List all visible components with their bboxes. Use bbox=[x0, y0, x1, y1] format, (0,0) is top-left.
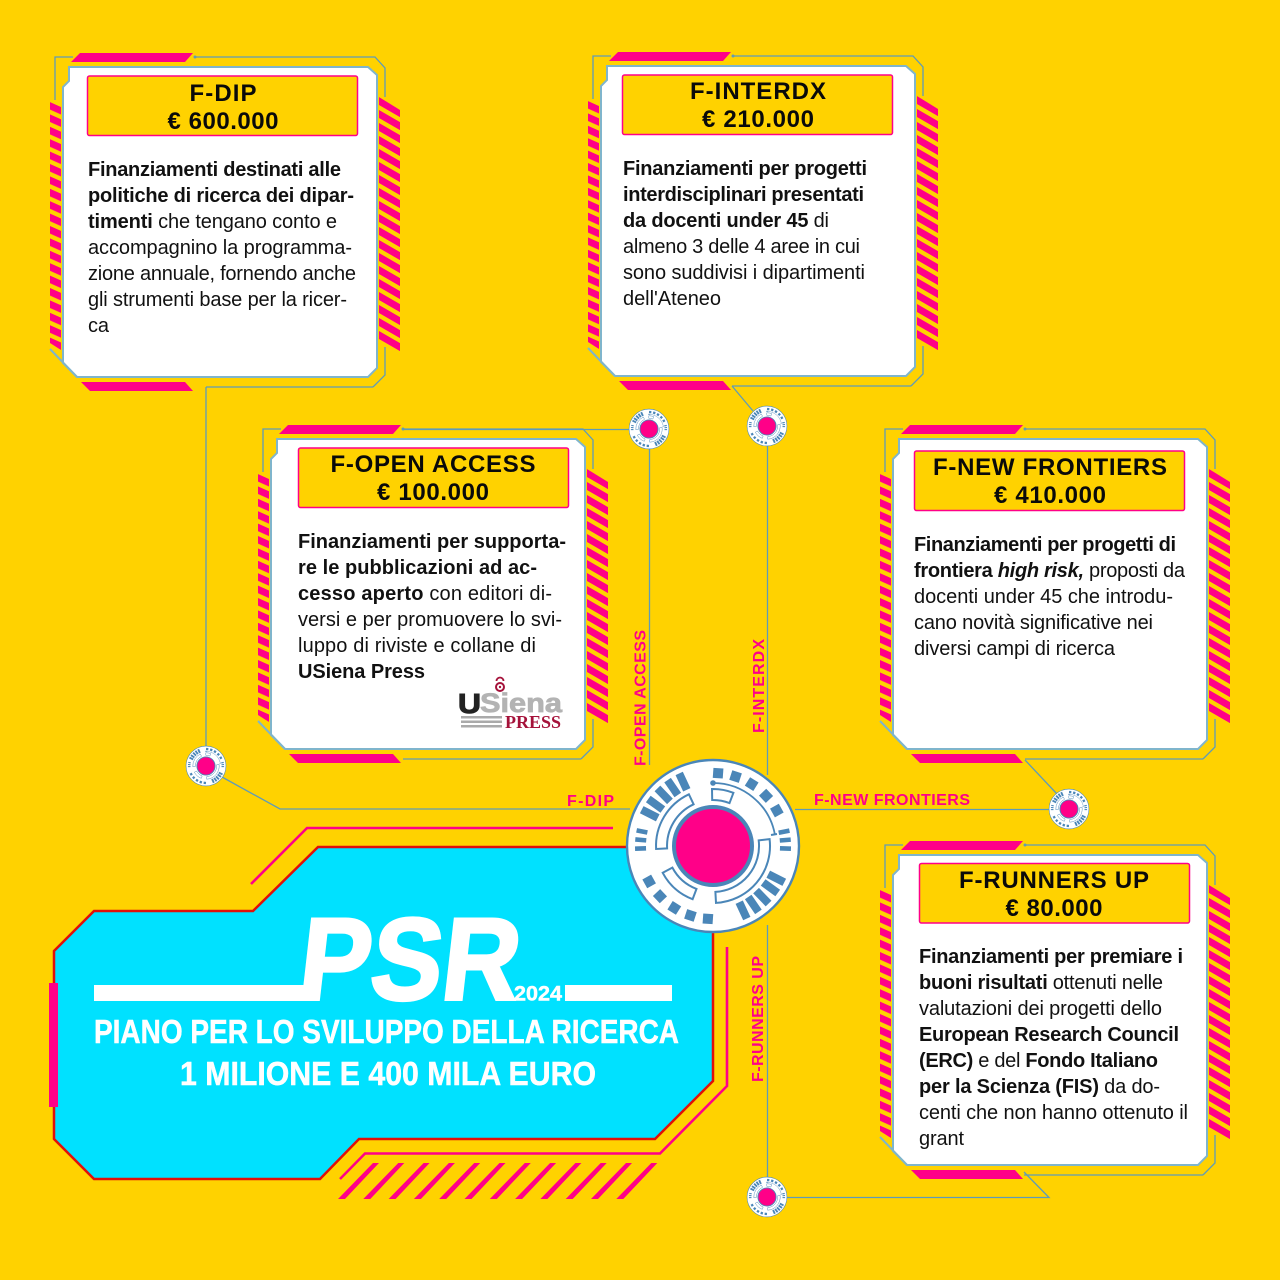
card: F-RUNNERS UP bbox=[880, 841, 1230, 1179]
text: F-RUNNERS UP description: grant bbox=[919, 1128, 964, 1150]
label: F-NEW FRONTIERS: F-NEW FRONTIERS bbox=[814, 792, 970, 809]
header: F-INTERDX: F-INTERDX bbox=[690, 78, 826, 105]
text: F-DIP description: accompagnino la programma- bbox=[88, 237, 352, 259]
label: F-RUNNERS UP: F-RUNNERS UP bbox=[750, 956, 767, 1082]
header: F-OPEN ACCESS: € 100.000 bbox=[377, 479, 489, 506]
text: F-INTERDX description: da docenti under 45 di bbox=[623, 210, 829, 232]
node: F-OPEN ACCESS bbox=[629, 409, 669, 449]
text: F-RUNNERS UP description: (ERC) e del Fondo Italiano bbox=[919, 1050, 1158, 1072]
decoration: pink stripes bbox=[338, 1163, 657, 1199]
text: F-OPEN ACCESS description: USiena Press bbox=[298, 661, 425, 683]
text: F-OPEN ACCESS description bbox=[298, 531, 566, 683]
central hub bbox=[627, 760, 799, 932]
text: F-DIP description bbox=[88, 159, 356, 337]
header: F-INTERDX bbox=[622, 75, 892, 134]
text: F-INTERDX description: interdisciplinari presentati bbox=[623, 184, 864, 206]
text: F-DIP description: politiche di ricerca dei dipar- bbox=[88, 185, 354, 207]
text: F-OPEN ACCESS description: versi e per promuovere lo svi- bbox=[298, 609, 562, 631]
text: F-DIP description: ca bbox=[88, 315, 110, 337]
card: F-DIP bbox=[50, 53, 400, 391]
card: F-OPEN ACCESS bbox=[258, 425, 608, 763]
logo: USiena Press bbox=[458, 678, 563, 732]
text: F-INTERDX description: sono suddivisi i dipartimenti bbox=[623, 262, 865, 284]
header: F-RUNNERS UP: F-RUNNERS UP bbox=[959, 867, 1149, 894]
node: F-RUNNERS UP bbox=[747, 1177, 787, 1217]
header: F-NEW FRONTIERS bbox=[914, 451, 1184, 510]
header: F-NEW FRONTIERS: F-NEW FRONTIERS bbox=[933, 454, 1167, 481]
header: F-DIP bbox=[88, 76, 358, 136]
text: F-RUNNERS UP description bbox=[919, 946, 1188, 1150]
text: F-DIP description: zione annuale, fornendo anche bbox=[88, 263, 356, 285]
logo: USiena Press: Siena bbox=[480, 688, 563, 718]
header: F-OPEN ACCESS bbox=[298, 448, 568, 508]
text: F-INTERDX description: Finanziamenti per progetti bbox=[623, 158, 867, 180]
text: F-NEW FRONTIERS description: cano novità significative nei bbox=[914, 612, 1153, 634]
logo: USiena Press: U bbox=[458, 688, 481, 719]
card: F-INTERDX bbox=[588, 52, 938, 390]
subtitle bbox=[94, 1013, 679, 1092]
subtitle: 1 MILIONE E 400 MILA EURO bbox=[180, 1055, 596, 1092]
text: F-NEW FRONTIERS description bbox=[914, 534, 1186, 660]
decoration: pink outline strokes bbox=[251, 828, 727, 1179]
text: F-OPEN ACCESS description: cesso aperto con editori di- bbox=[298, 583, 552, 605]
text: F-INTERDX description: dell'Ateneo bbox=[623, 288, 721, 310]
text: F-DIP description: Finanziamenti destinati alle bbox=[88, 159, 341, 181]
text: F-RUNNERS UP description: European Research Council bbox=[919, 1024, 1179, 1046]
text: F-RUNNERS UP description: per la Scienza (FIS) da do- bbox=[919, 1076, 1160, 1098]
text: F-NEW FRONTIERS description: diversi campi di ricerca bbox=[914, 638, 1116, 660]
subtitle: PIANO PER LO SVILUPPO DELLA RICERCA bbox=[94, 1013, 679, 1050]
header: F-DIP: € 600.000 bbox=[168, 108, 278, 135]
year: 2024: 2024 bbox=[514, 982, 562, 1006]
text: F-NEW FRONTIERS description: frontiera high risk, proposti da bbox=[914, 560, 1186, 582]
logo: USiena Press: PRESS bbox=[505, 712, 561, 732]
header: F-NEW FRONTIERS: € 410.000 bbox=[994, 482, 1106, 509]
header: F-DIP: F-DIP bbox=[190, 80, 256, 107]
text: F-RUNNERS UP description: Finanziamenti per premiare i bbox=[919, 946, 1183, 968]
card: F-NEW FRONTIERS bbox=[880, 425, 1230, 763]
node: F-DIP bbox=[186, 746, 226, 786]
text: F-NEW FRONTIERS description: Finanziamenti per progetti di bbox=[914, 534, 1176, 556]
connector lines bbox=[206, 386, 1057, 1198]
text: F-OPEN ACCESS description: Finanziamenti per supporta- bbox=[298, 531, 566, 553]
header: F-RUNNERS UP: € 80.000 bbox=[1006, 895, 1102, 922]
header: F-OPEN ACCESS: F-OPEN ACCESS bbox=[330, 451, 536, 478]
label: F-OPEN ACCESS: F-OPEN ACCESS bbox=[632, 630, 650, 766]
text: F-OPEN ACCESS description: re le pubblicazioni ad ac- bbox=[298, 557, 537, 579]
text: F-RUNNERS UP description: centi che non hanno ottenuto il bbox=[919, 1102, 1188, 1124]
heading: PSR: PSR bbox=[293, 894, 528, 1024]
header: F-INTERDX: € 210.000 bbox=[702, 106, 814, 133]
text: F-DIP description: gli strumenti base per la ricer- bbox=[88, 289, 347, 311]
label: F-DIP: F-DIP bbox=[567, 793, 614, 810]
header: F-RUNNERS UP bbox=[920, 864, 1190, 923]
text: F-NEW FRONTIERS description: docenti under 45 che introdu- bbox=[914, 586, 1173, 608]
text: F-OPEN ACCESS description: luppo di riviste e collane di bbox=[298, 635, 536, 657]
panel: PSR title bbox=[49, 847, 713, 1179]
text: F-DIP description: timenti che tengano conto e bbox=[88, 211, 337, 233]
label: F-INTERDX: F-INTERDX bbox=[751, 639, 768, 733]
node: F-NEW FRONTIERS bbox=[1049, 789, 1089, 829]
text: F-INTERDX description: almeno 3 delle 4 aree in cui bbox=[623, 236, 860, 258]
text: F-RUNNERS UP description: buoni risultati ottenuti nelle bbox=[919, 972, 1163, 994]
node: F-INTERDX bbox=[747, 406, 787, 446]
text: F-INTERDX description bbox=[623, 158, 867, 310]
text: F-RUNNERS UP description: valutazioni dei progetti dello bbox=[919, 998, 1162, 1020]
